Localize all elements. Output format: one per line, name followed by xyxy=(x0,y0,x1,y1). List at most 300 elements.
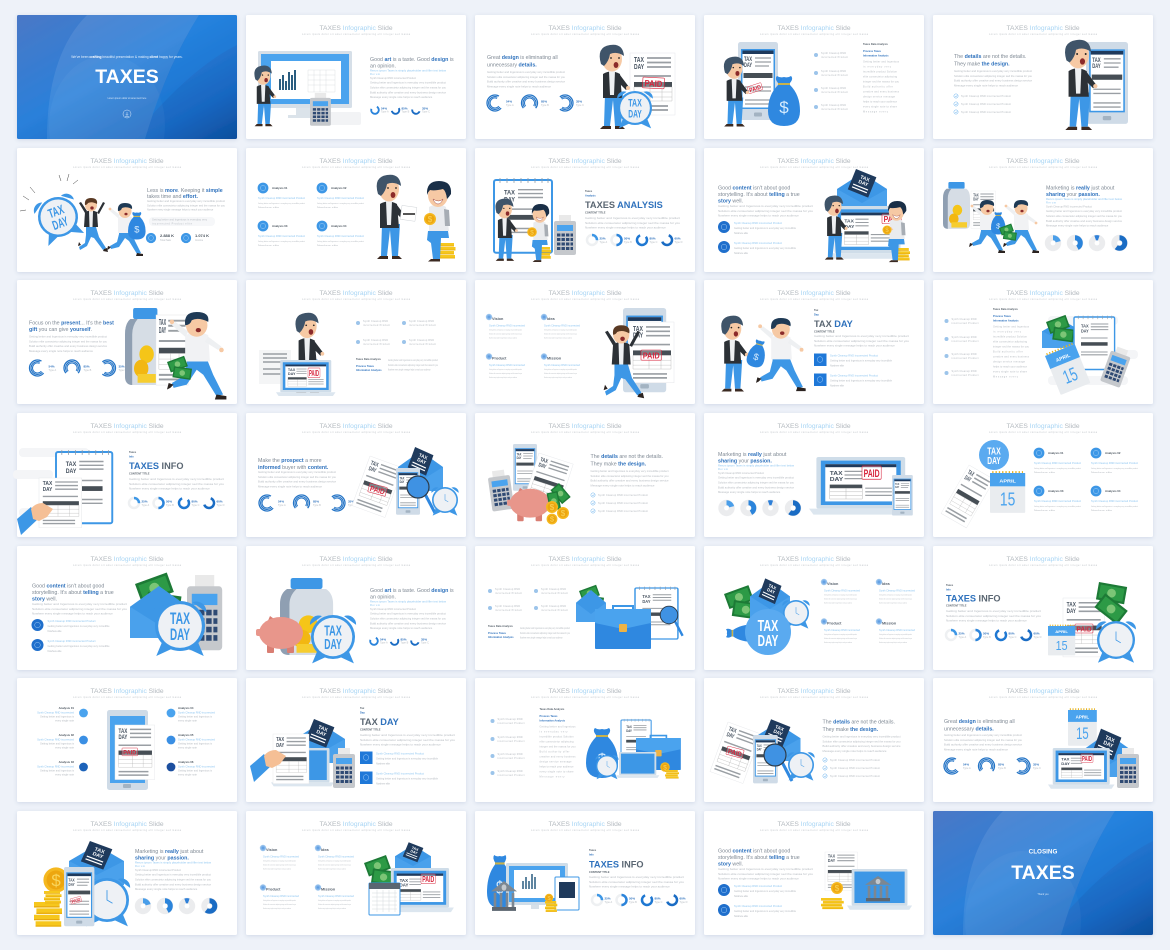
left analyses: Synth Cleanup RND incorrected xyxy=(37,764,75,768)
title: Lorem ipsum dolor sit amet consectetur adipiscing elit integer sed massa xyxy=(302,166,411,169)
illustration: notebook, calendar, money and calculator xyxy=(1042,315,1138,395)
title: TAXES Infographic Slide xyxy=(548,423,622,430)
title: Lorem ipsum dolor sit amet consectetur adipiscing elit integer sed massa xyxy=(302,431,411,434)
title: Lorem ipsum dolor sit amet consectetur adipiscing elit integer sed massa xyxy=(989,696,1098,699)
vision grid xyxy=(821,579,916,644)
title: TAXES Infographic Slide xyxy=(1006,688,1080,695)
title: TAXES Infographic Slide xyxy=(777,158,851,165)
left analyses: Getting better and Ingenious is xyxy=(40,770,75,772)
title: TAXES Infographic Slide xyxy=(90,688,164,695)
donut charts xyxy=(587,233,683,247)
illustration: phone with paid document xyxy=(107,710,155,790)
icon list xyxy=(488,588,568,612)
icon list xyxy=(944,318,979,377)
donut charts xyxy=(129,496,225,510)
text note: Taxes Data Analysis xyxy=(488,624,513,628)
illustration: envelope, briefcase, notebook and magnifier xyxy=(576,585,683,649)
heading: informed buyer with content. xyxy=(258,465,328,471)
heading: Focus on the present... It's the best xyxy=(29,320,114,326)
analysis items: Analysis 04 xyxy=(1105,489,1121,493)
body text xyxy=(718,205,814,218)
ring charts xyxy=(484,92,584,114)
panel: slide taxes info with notebook xyxy=(13,413,237,537)
analysis items: Analysis 02 xyxy=(1105,451,1121,455)
big heading xyxy=(585,189,663,214)
title: TAXES Infographic Slide xyxy=(319,821,393,828)
panel: slide less is more xyxy=(17,148,237,272)
vision grid xyxy=(260,845,355,910)
title: Lorem ipsum dolor sit amet consectetur adipiscing elit integer sed massa xyxy=(760,564,869,567)
check list xyxy=(591,493,648,513)
heading: Great design is eliminating all xyxy=(487,55,558,61)
illustration: man with paid document and clock xyxy=(600,45,675,129)
donut charts xyxy=(946,628,1042,642)
text note: Information Analysis xyxy=(356,368,382,372)
illustration: phone, man and bag xyxy=(724,42,800,127)
big heading xyxy=(360,706,399,732)
heading: storytelling. It's about telling a true xyxy=(718,192,800,198)
ring charts xyxy=(26,357,127,379)
title: TAXES Infographic Slide xyxy=(1006,158,1080,165)
title xyxy=(531,556,640,567)
heading: The details are not the details. xyxy=(954,54,1026,60)
title xyxy=(302,423,411,434)
title xyxy=(73,423,182,434)
illustration: hand, paper and notebook xyxy=(13,448,112,535)
title: Lorem ipsum dolor sit amet consectetur adipiscing elit integer sed massa xyxy=(73,829,182,832)
title xyxy=(73,821,182,832)
title: TAXES Infographic Slide xyxy=(777,25,851,32)
panel: slide great design xyxy=(475,15,695,139)
panel: slide phone and money bag xyxy=(704,15,924,139)
body text xyxy=(32,603,128,616)
body text xyxy=(589,876,685,889)
title xyxy=(760,423,869,434)
cover tagline: We've been crafting beautiful presentation & making client happy for years. xyxy=(71,55,183,59)
big heading: Taxes xyxy=(129,450,137,454)
heading: Marketing is really just about xyxy=(135,849,203,855)
title xyxy=(760,688,869,699)
text column xyxy=(540,707,576,778)
illustration: money envelope, register and clock xyxy=(130,572,222,656)
donut charts xyxy=(370,105,430,115)
heading: Make the prospect a more xyxy=(258,458,322,464)
text note: Information Analysis xyxy=(488,635,514,639)
panel: slide taxes info with bank xyxy=(475,811,695,935)
illustration: envelope, money, laptop and calendar xyxy=(364,842,454,915)
right analyses: Analysis 04 xyxy=(178,706,194,710)
left analyses: Synth Cleanup RND incorrected xyxy=(37,710,75,714)
panel: slide marketing with coins and clock xyxy=(17,811,237,935)
analysis items: Analysis 01 xyxy=(1048,451,1064,455)
title: Lorem ipsum dolor sit amet consectetur adipiscing elit integer sed massa xyxy=(302,564,411,567)
right analyses: Getting better and Ingenious is xyxy=(178,716,213,718)
left analyses: every single note xyxy=(55,720,75,722)
donut charts xyxy=(592,893,688,907)
illustration: calendar, envelope, laptop and calculator xyxy=(1048,709,1139,789)
panel: cover slide xyxy=(17,15,237,195)
panel: slide analysis with two men xyxy=(246,148,466,272)
big heading: TAXES INFO xyxy=(589,860,643,870)
body text xyxy=(946,610,1042,623)
illustration: man and phone xyxy=(1065,40,1128,130)
illustration: envelope, laptop and two men xyxy=(825,169,910,262)
illustration: man handing paper to runner xyxy=(721,316,806,392)
vision grid xyxy=(486,314,581,379)
body text xyxy=(1046,197,1123,228)
heading: an opinion. xyxy=(370,594,396,600)
big heading: CONTENT TITLE xyxy=(585,210,606,214)
big heading: CONTENT TITLE xyxy=(946,604,967,608)
title: TAXES Infographic Slide xyxy=(548,556,622,563)
heading: They make the design. xyxy=(954,62,1010,68)
big heading: Day xyxy=(360,710,365,714)
big heading: Info xyxy=(589,852,594,856)
icon list xyxy=(490,718,525,777)
heading: unnecessary details. xyxy=(487,62,537,68)
big heading: CONTENT TITLE xyxy=(589,870,610,874)
title xyxy=(531,25,640,36)
title xyxy=(531,158,640,169)
icon rows xyxy=(718,221,797,255)
text note xyxy=(488,624,570,640)
panel: slide taxes analysis xyxy=(475,148,695,272)
title: TAXES Infographic Slide xyxy=(90,158,164,165)
illustration: man behind laptop with papers xyxy=(259,313,336,396)
panel: slide informed buyer xyxy=(246,413,466,537)
body text xyxy=(258,471,337,489)
illustration: envelope, hand, laptop and calculator xyxy=(250,719,355,788)
title: TAXES Infographic Slide xyxy=(90,423,164,430)
panel: slide details with magnifier xyxy=(704,678,924,802)
title: TAXES Infographic Slide xyxy=(319,25,393,32)
title: TAXES Infographic Slide xyxy=(319,556,393,563)
title: TAXES Infographic Slide xyxy=(90,556,164,563)
icon: download circle xyxy=(123,110,131,118)
panel: slide man at laptop xyxy=(246,280,466,404)
illustration: monitor with accountant xyxy=(254,51,361,126)
panel: slide vision idea product mission xyxy=(475,280,695,404)
title xyxy=(302,25,411,36)
big heading: CONTENT TITLE xyxy=(360,728,381,732)
text note: Process Taxes xyxy=(356,364,375,368)
heading: sharing your passion. xyxy=(135,856,189,862)
text note xyxy=(356,357,438,372)
illustration: notebook, men and calculator xyxy=(494,178,576,262)
ring charts xyxy=(256,492,356,514)
body text xyxy=(822,735,901,753)
text column xyxy=(993,307,1030,378)
panel: slide details with phone xyxy=(933,15,1153,139)
big heading: Day xyxy=(814,312,819,316)
title: Lorem ipsum dolor sit amet consectetur adipiscing elit integer sed massa xyxy=(302,696,411,699)
text note: Process Taxes xyxy=(488,631,507,635)
title: TAXES Infographic Slide xyxy=(777,821,851,828)
right analyses xyxy=(167,706,215,776)
panel: slide art with pig and jar xyxy=(246,546,466,670)
title: Lorem ipsum dolor sit amet consectetur adipiscing elit integer sed massa xyxy=(73,696,182,699)
big heading xyxy=(129,450,183,476)
illustration: bag, monitor, bank and clipboard xyxy=(487,855,579,912)
heading: storytelling. It's about telling a true xyxy=(718,855,800,861)
title: Lorem ipsum dolor sit amet consectetur adipiscing elit integer sed massa xyxy=(73,431,182,434)
title: TAXES Infographic Slide xyxy=(1006,290,1080,297)
stat 2.888 K: 2.888 K xyxy=(160,233,174,238)
panel: slide tax day analysis grid xyxy=(933,413,1153,537)
right analyses: Synth Cleanup RND incorrected xyxy=(178,764,215,768)
title: Lorem ipsum dolor sit amet consectetur adipiscing elit integer sed massa xyxy=(760,298,869,301)
left analyses: Analysis 03 xyxy=(59,760,74,764)
analysis items xyxy=(1034,448,1138,512)
title: Lorem ipsum dolor sit amet consectetur adipiscing elit integer sed massa xyxy=(989,33,1098,36)
heading: Marketing is really just about xyxy=(1046,186,1114,192)
title: Lorem ipsum dolor sit amet consectetur adipiscing elit integer sed massa xyxy=(989,166,1098,169)
panel: slide vision grid with laptop xyxy=(246,811,466,935)
title: TAXES Infographic Slide xyxy=(777,423,851,430)
analysis items xyxy=(258,183,364,247)
illustration: man hands paper to seated man xyxy=(377,175,456,262)
text note: Taxes Data Analysis xyxy=(356,357,381,361)
panel: slide briefcase xyxy=(475,546,695,670)
title: Lorem ipsum dolor sit amet consectetur adipiscing elit integer sed massa xyxy=(760,166,869,169)
heading: an opinion. xyxy=(370,64,396,70)
title: Lorem ipsum dolor sit amet consectetur adipiscing elit integer sed massa xyxy=(989,431,1098,434)
body text xyxy=(718,464,795,494)
title: Lorem ipsum dolor sit amet consectetur adipiscing elit integer sed massa xyxy=(531,829,640,832)
analysis items: Analysis 04 xyxy=(331,224,347,228)
big heading: Tax xyxy=(814,308,819,312)
title: TAXES Infographic Slide xyxy=(548,821,622,828)
big heading: CONTENT TITLE xyxy=(129,472,150,476)
panel: slide details with piggy bank xyxy=(475,413,695,537)
big heading: Taxes xyxy=(585,189,593,193)
left analyses: every single note xyxy=(55,774,75,776)
body text xyxy=(370,68,447,99)
check list xyxy=(954,94,1011,114)
panel: slide content with bank laptop xyxy=(704,811,924,935)
stat 1.074 K: 1.074 K xyxy=(195,233,209,238)
heading: sharing your passion. xyxy=(718,458,772,464)
illustration: money, envelope, clock and badge xyxy=(724,578,810,655)
title: Lorem ipsum dolor sit amet consectetur adipiscing elit integer sed massa xyxy=(73,298,182,301)
heading: story well. xyxy=(32,596,57,602)
analysis items: Analysis 01 xyxy=(272,186,288,190)
right analyses: Analysis 06 xyxy=(178,760,194,764)
check list xyxy=(823,758,880,778)
big heading: Info xyxy=(946,588,951,592)
title xyxy=(531,423,640,434)
heading: They make the design. xyxy=(590,462,646,468)
title xyxy=(302,290,411,301)
panel: slide tax day badge with vision grid xyxy=(704,546,924,670)
illustration: jar, document and running man xyxy=(125,308,226,399)
body text xyxy=(129,478,225,491)
big heading xyxy=(589,848,643,874)
right analyses: Getting better and Ingenious is xyxy=(178,742,213,746)
heading: They make the design. xyxy=(822,727,878,733)
stat 1.074 K: Income xyxy=(195,239,204,242)
left analyses: Analysis 01 xyxy=(59,706,74,710)
title xyxy=(989,556,1098,567)
title: TAXES Infographic Slide xyxy=(90,821,164,828)
title xyxy=(73,688,182,699)
icon list xyxy=(356,320,436,346)
title xyxy=(73,556,182,567)
left analyses xyxy=(37,706,88,776)
title: TAXES Infographic Slide xyxy=(777,688,851,695)
title: TAXES Infographic Slide xyxy=(90,290,164,297)
panel: slide bag, briefcase and coins xyxy=(475,678,695,802)
title: Lorem ipsum dolor sit amet consectetur adipiscing elit integer sed massa xyxy=(531,431,640,434)
title xyxy=(531,821,640,832)
callout: Getting better and Ingenious is everyday very xyxy=(152,218,208,222)
big heading: Taxes xyxy=(589,848,597,852)
big heading: CONTENT TITLE xyxy=(814,330,835,334)
title: Lorem ipsum dolor sit amet consectetur adipiscing elit integer sed massa xyxy=(302,33,411,36)
title xyxy=(760,556,869,567)
title: Lorem ipsum dolor sit amet consectetur adipiscing elit integer sed massa xyxy=(760,829,869,832)
left analyses: every single note xyxy=(55,746,75,750)
heading: sharing your passion. xyxy=(1046,192,1100,198)
cover title: TAXES xyxy=(95,66,159,88)
illustration: document, envelope, magnifier and clock xyxy=(352,447,459,518)
title: Lorem ipsum dolor sit amet consectetur adipiscing elit integer sed massa xyxy=(760,33,869,36)
title xyxy=(760,821,869,832)
title xyxy=(989,158,1098,169)
title: Lorem ipsum dolor sit amet consectetur adipiscing elit integer sed massa xyxy=(302,298,411,301)
heading: story well. xyxy=(718,198,743,204)
right analyses: every single note xyxy=(178,774,198,776)
title: TAXES Infographic Slide xyxy=(319,290,393,297)
illustration: bag, clock, laptop, briefcase and coins xyxy=(586,719,681,779)
title: Lorem ipsum dolor sit amet consectetur adipiscing elit integer sed massa xyxy=(302,829,411,832)
big heading: Taxes xyxy=(946,583,954,587)
illustration: tax day badge, document and calendar xyxy=(941,440,1025,528)
illustration: laptop and phone xyxy=(809,457,913,516)
big heading: TAXES INFO xyxy=(946,594,1000,604)
title xyxy=(760,158,869,169)
title xyxy=(302,158,411,169)
title xyxy=(73,158,182,169)
analysis items: Analysis 03 xyxy=(1048,489,1064,493)
illustration: document, envelope, magnifier and clock xyxy=(710,719,815,784)
title xyxy=(302,688,411,699)
body text xyxy=(135,860,212,891)
title: TAXES Infographic Slide xyxy=(1006,423,1080,430)
title xyxy=(989,290,1098,301)
heading: storytelling. It's about telling a true xyxy=(32,590,114,596)
title: Lorem ipsum dolor sit amet consectetur adipiscing elit integer sed massa xyxy=(531,298,640,301)
panel: slide marketing with laptop xyxy=(704,413,924,537)
title: Lorem ipsum dolor sit amet consectetur adipiscing elit integer sed massa xyxy=(989,564,1098,567)
title: TAXES Infographic Slide xyxy=(319,688,393,695)
illustration: ringing clock and runners xyxy=(20,174,146,256)
title: Lorem ipsum dolor sit amet consectetur adipiscing elit integer sed massa xyxy=(73,564,182,567)
right analyses: Synth Cleanup RND incorrected xyxy=(178,710,215,714)
panel: slide phone with six analyses xyxy=(17,678,237,802)
body text xyxy=(487,71,566,89)
panel: slide data analysis with calendar xyxy=(933,280,1153,404)
left analyses: Synth Cleanup RND incorrected xyxy=(37,738,75,742)
big heading: Tax xyxy=(360,706,365,710)
illustration: phone with screaming man xyxy=(604,308,674,398)
heading: Great design is eliminating all xyxy=(944,719,1015,725)
title: Lorem ipsum dolor sit amet consectetur adipiscing elit integer sed massa xyxy=(531,166,640,169)
title: Lorem ipsum dolor sit amet consectetur adipiscing elit integer sed massa xyxy=(531,564,640,567)
heading: takes time and effort. xyxy=(147,194,198,200)
big heading xyxy=(946,583,1000,608)
big heading: TAX DAY xyxy=(814,319,853,329)
heading: The details are not the details. xyxy=(590,454,663,460)
right analyses: every single note xyxy=(178,746,198,750)
right analyses: Analysis 05 xyxy=(178,733,194,737)
cover subtitle: Lorem ipsum dolor sit amet text here xyxy=(108,97,147,100)
panel: slide tax day with laptop xyxy=(246,678,466,802)
title: TAXES Infographic Slide xyxy=(777,290,851,297)
panel: closing slide xyxy=(933,811,1153,950)
body text xyxy=(585,217,681,230)
illustration: coins, phone, envelope and clock xyxy=(34,841,130,927)
title xyxy=(760,25,869,36)
heading: Marketing is really just about xyxy=(718,452,786,458)
illustration: calculator, phone, piggy bank and coins xyxy=(487,444,573,524)
title: Lorem ipsum dolor sit amet consectetur adipiscing elit integer sed massa xyxy=(531,33,640,36)
icon rows xyxy=(814,354,893,388)
heading: Good content isn't about good xyxy=(718,186,790,192)
big heading: Analysis xyxy=(585,194,596,198)
stat 2.888 K xyxy=(146,233,174,243)
title xyxy=(73,290,182,301)
pie charts xyxy=(718,500,801,516)
panel: slide taxes info with clock xyxy=(933,546,1153,670)
title: TAXES Infographic Slide xyxy=(319,423,393,430)
closing subtitle: Thank you xyxy=(1037,893,1049,896)
ring charts xyxy=(941,755,1041,777)
title xyxy=(989,423,1098,434)
heading: Good art is a taste. Good design is xyxy=(370,588,454,594)
body text xyxy=(147,200,226,212)
analysis items: Analysis 03 xyxy=(272,224,288,228)
title xyxy=(531,688,640,699)
heading: Good art is a taste. Good design is xyxy=(370,57,454,63)
illustration: document, coins and laptop with bank xyxy=(821,852,912,910)
title: TAXES Infographic Slide xyxy=(1006,556,1080,563)
title: TAXES Infographic Slide xyxy=(1006,25,1080,32)
title: TAXES Infographic Slide xyxy=(319,158,393,165)
title: Lorem ipsum dolor sit amet consectetur adipiscing elit integer sed massa xyxy=(760,431,869,434)
title: TAXES Infographic Slide xyxy=(548,25,622,32)
callout xyxy=(149,217,215,226)
stat 2.888 K: Total Sale xyxy=(160,239,172,242)
title: Lorem ipsum dolor sit amet consectetur adipiscing elit integer sed massa xyxy=(989,298,1098,301)
illustration: money, document, calendar and clock xyxy=(1048,574,1138,663)
panel: slide art is a taste xyxy=(246,15,466,139)
title: TAXES Infographic Slide xyxy=(548,158,622,165)
left analyses: Getting better and Ingenious is xyxy=(40,742,75,746)
analysis items: Analysis 02 xyxy=(331,186,347,190)
heading: Good content isn't about good xyxy=(32,584,104,590)
body text xyxy=(590,470,669,488)
body text xyxy=(944,734,1023,752)
pie charts xyxy=(135,898,218,914)
left analyses: Getting better and Ingenious is xyxy=(40,716,75,718)
title xyxy=(760,290,869,301)
body text xyxy=(718,868,814,881)
title xyxy=(302,821,411,832)
title: TAXES Infographic Slide xyxy=(548,290,622,297)
icon list xyxy=(814,52,848,111)
right analyses: Getting better and Ingenious is xyxy=(178,770,213,772)
